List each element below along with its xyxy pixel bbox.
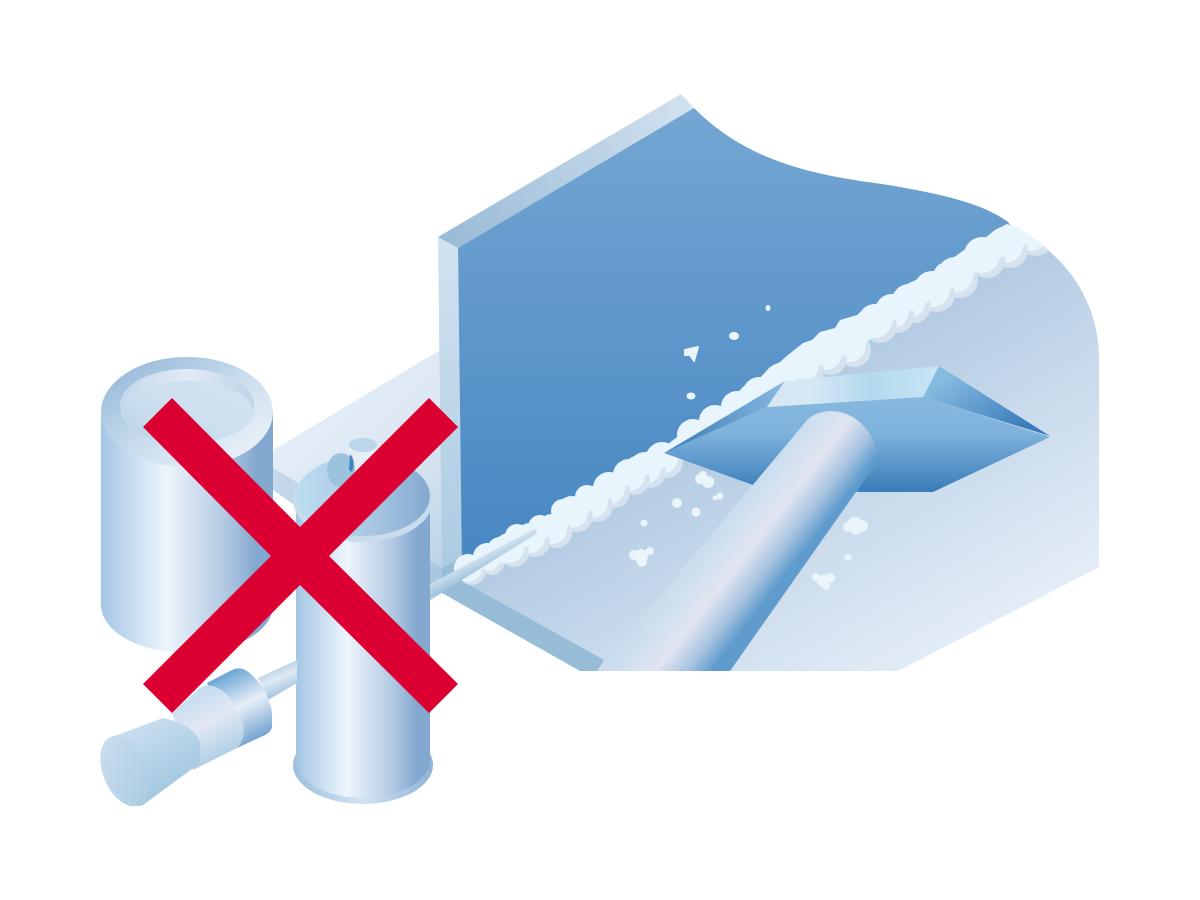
panel: blue plate face xyxy=(458,108,1020,570)
spray can dome xyxy=(296,456,430,536)
scraper blade top bevel xyxy=(767,366,939,407)
red cross: prohibited xyxy=(143,398,458,713)
sealant bead xyxy=(454,215,1054,585)
panel: plate top edge xyxy=(438,94,694,248)
panel: plate left edge xyxy=(438,237,462,568)
scraper blade left facet xyxy=(664,381,785,453)
gun nozzle cone xyxy=(112,718,200,806)
sealant debris flakes xyxy=(629,305,868,590)
panel: pale back plate xyxy=(273,350,442,600)
scraper blade main face xyxy=(664,397,1050,492)
tin top ring xyxy=(101,357,273,467)
panel: plate front edge xyxy=(442,557,604,671)
illustration: removing sealant bead with a scraper, no chemical cans xyxy=(100,94,1099,806)
bead upper lobes, lower half xyxy=(482,449,665,570)
can: left paint tin xyxy=(101,357,273,653)
scraper blade right facet xyxy=(923,366,1050,436)
gun middle collar xyxy=(172,686,244,770)
gun rear block xyxy=(207,668,272,748)
thin applicator tube xyxy=(430,529,537,600)
spray can rim xyxy=(293,458,433,542)
tin recess xyxy=(120,369,254,441)
panel: floor surface xyxy=(462,225,1099,671)
spray nozzle xyxy=(349,445,377,478)
scraper handle xyxy=(597,411,877,671)
gun nozzle face xyxy=(91,728,159,814)
scraper xyxy=(597,366,1050,671)
can: right spray can xyxy=(293,438,433,804)
applicator gun xyxy=(91,660,297,814)
